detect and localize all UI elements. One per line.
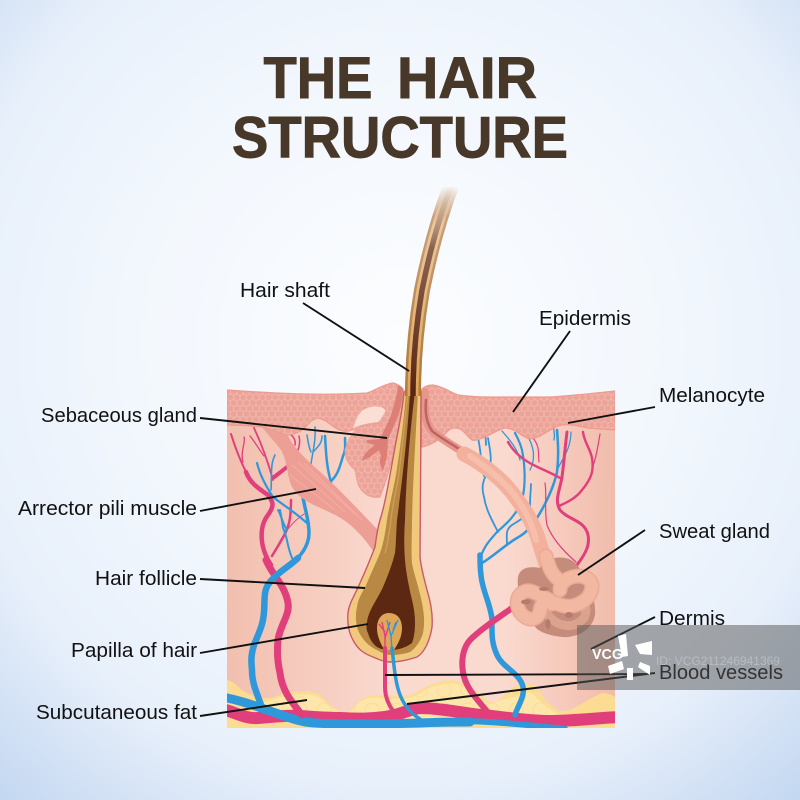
label: blood vessels: Blood vessels (659, 661, 783, 684)
title: STRUCTURE (232, 106, 568, 170)
label: melanocyte (568, 384, 765, 423)
left veins (blue) (251, 427, 345, 708)
arrector pili muscle (262, 427, 378, 552)
epidermis layer (227, 383, 615, 447)
panel: skin cross-section (222, 383, 620, 729)
bottom blood vessels (222, 697, 620, 729)
hair follicle (348, 392, 432, 662)
label: arrector pili muscle: Arrector pili muscle (18, 497, 197, 520)
label: papilla of hair: Papilla of hair (71, 639, 197, 662)
label: blood vessels (385, 661, 783, 704)
label: hair follicle (95, 567, 365, 590)
watermark band: VCG (592, 646, 623, 663)
title (232, 46, 568, 170)
title: HAIR (397, 46, 537, 111)
papilla vessels (385, 648, 420, 719)
label: hair follicle: Hair follicle (95, 567, 197, 590)
label: dermis: Dermis (659, 607, 725, 630)
sweat gland coil (517, 556, 595, 637)
label: epidermis (513, 307, 631, 412)
sweat gland duct (425, 392, 550, 575)
papilla of hair (377, 613, 402, 650)
label: subcutaneous fat: Subcutaneous fat (36, 701, 197, 724)
label: sebaceous gland (41, 404, 387, 438)
left arteries (red) (231, 428, 304, 715)
subcutaneous fat layer (227, 680, 615, 728)
label: epidermis: Epidermis (539, 307, 631, 330)
label: sweat gland (578, 520, 770, 575)
label: sebaceous gland: Sebaceous gland (41, 404, 197, 427)
watermark band: ID: VCG211246941369 (656, 654, 780, 668)
title: THE (264, 46, 372, 111)
dermis layer (227, 420, 615, 728)
right veins (blue) (478, 426, 571, 715)
label: hair shaft (240, 279, 409, 371)
hair shaft (413, 186, 451, 396)
hair root core (366, 392, 415, 650)
label: subcutaneous fat (36, 700, 307, 724)
label: papilla of hair (71, 624, 368, 662)
label: dermis (591, 607, 725, 649)
label: arrector pili muscle (18, 489, 316, 520)
sebaceous gland (345, 385, 403, 497)
watermark band (577, 625, 800, 690)
label: sweat gland: Sweat gland (659, 520, 770, 543)
label: hair shaft: Hair shaft (240, 279, 330, 302)
label: melanocyte: Melanocyte (659, 384, 765, 407)
right dermis vessels (462, 426, 600, 715)
right arteries (red) (462, 432, 600, 715)
